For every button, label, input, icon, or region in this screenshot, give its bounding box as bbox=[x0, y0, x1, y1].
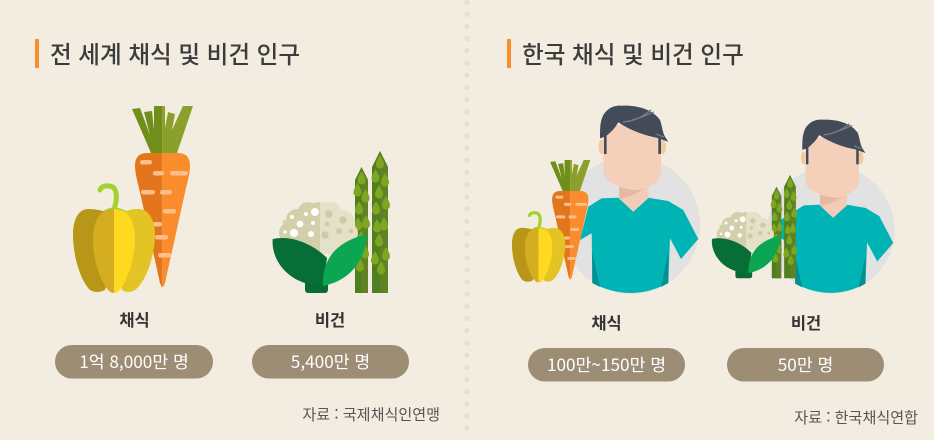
panel: Korea vegetarian and vegan population bbox=[507, 36, 918, 428]
source: Korea: 자료 : 한국채식연합 bbox=[794, 406, 918, 428]
label: vegetarian: 채식 bbox=[591, 310, 622, 334]
value pill: vegetarian world: 1억 8,000만 명 bbox=[79, 348, 189, 373]
label: vegetarian: 채식 bbox=[119, 307, 150, 331]
value pill: vegan world: 5,400만 명 bbox=[291, 348, 370, 373]
value pill: vegetarian world bbox=[55, 345, 213, 378]
value pill: vegan Korea bbox=[727, 348, 884, 382]
label: vegan: 비건 bbox=[791, 310, 821, 334]
icon: person with carrot and pepper bbox=[512, 106, 700, 294]
icon: cauliflower and asparagus bbox=[273, 151, 390, 293]
value pill: vegetarian Korea bbox=[528, 348, 685, 382]
label: vegan: 비건 bbox=[315, 307, 345, 331]
value pill: vegetarian Korea: 100만~150만 명 bbox=[547, 351, 666, 376]
source: world: 자료 : 국제채식인연맹 bbox=[302, 403, 440, 425]
heading: world: 전 세계 채식 및 비건 인구 bbox=[50, 36, 300, 70]
value pill: vegan Korea: 50만 명 bbox=[778, 351, 833, 376]
value pill: vegan world bbox=[252, 345, 409, 378]
icon: person with cauliflower and asparagus bbox=[712, 120, 895, 294]
icon: carrot and pepper bbox=[73, 106, 193, 293]
panel: world vegetarian and vegan population bbox=[35, 36, 440, 425]
heading: Korea: 한국 채식 및 비건 인구 bbox=[522, 36, 744, 70]
